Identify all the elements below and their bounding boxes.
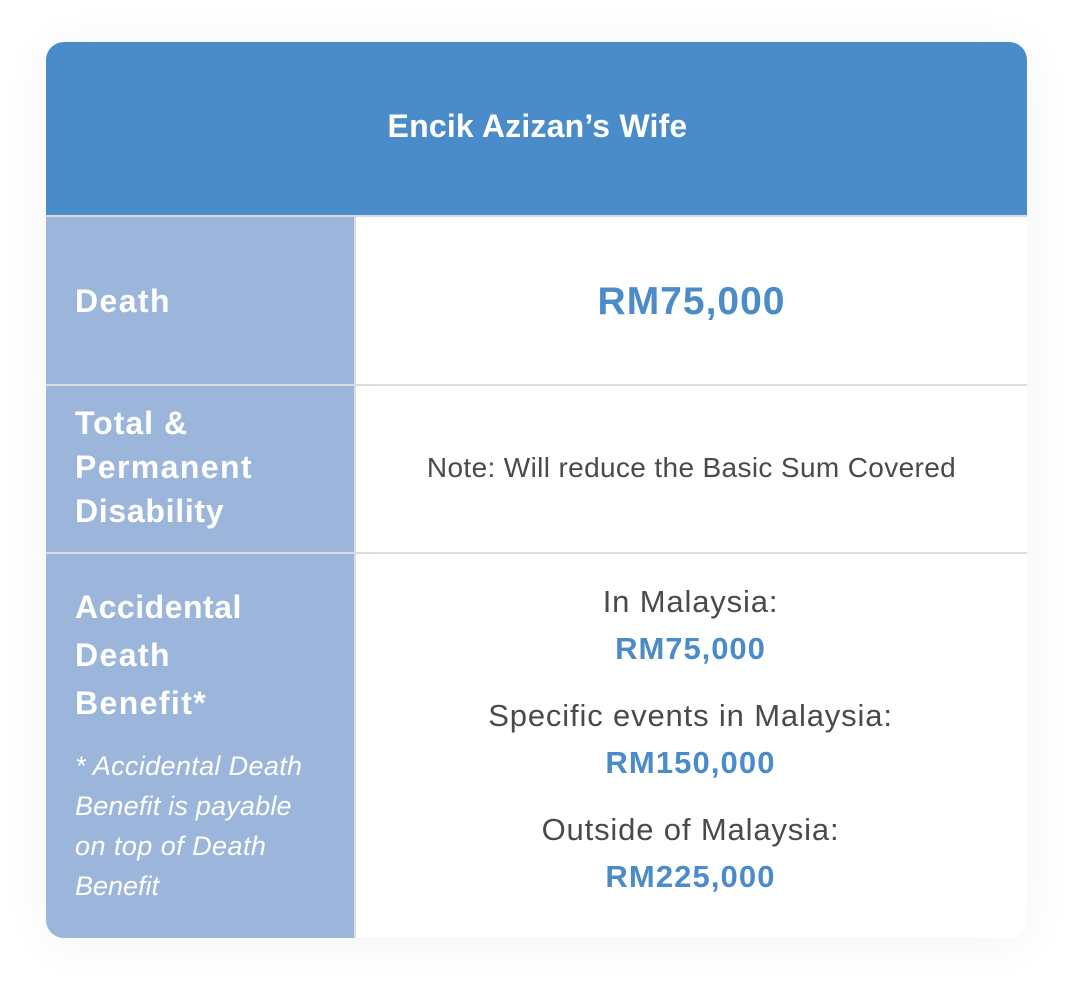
value: specific events: RM150,000 bbox=[605, 745, 776, 780]
footnote bbox=[75, 751, 302, 901]
title: Encik Azizan’s Wife bbox=[388, 108, 687, 144]
value: outside Malaysia: RM225,000 bbox=[605, 859, 776, 894]
value: death: RM75,000 bbox=[598, 280, 785, 323]
value: specific events: Specific events in Malaysia: bbox=[488, 698, 893, 733]
value: in Malaysia: In Malaysia: bbox=[603, 584, 778, 619]
value: in Malaysia: RM75,000 bbox=[615, 631, 766, 666]
value: specific events bbox=[488, 698, 893, 780]
footnote: * Accidental Death bbox=[75, 751, 302, 781]
value: in Malaysia bbox=[603, 584, 778, 666]
row label: accidental death benefit bbox=[75, 589, 242, 721]
footnote: Benefit is payable bbox=[75, 791, 292, 821]
row label: accidental death benefit: Benefit* bbox=[75, 685, 207, 721]
value: outside Malaysia: Outside of Malaysia: bbox=[542, 812, 839, 847]
row label: accidental death benefit: Accidental bbox=[75, 589, 242, 625]
row label: death: Death bbox=[75, 283, 171, 319]
row label: total and permanent disability: Disability bbox=[75, 493, 224, 529]
footnote: on top of Death bbox=[75, 831, 266, 861]
row dividers bbox=[46, 215, 1027, 217]
row label: total and permanent disability: Permanent bbox=[75, 449, 253, 485]
row label: total and permanent disability bbox=[75, 405, 253, 529]
note: Note: Will reduce the Basic Sum Covered bbox=[427, 452, 956, 483]
left column bbox=[46, 217, 354, 938]
header band bbox=[46, 42, 1027, 215]
value: outside Malaysia bbox=[542, 812, 839, 894]
row label: accidental death benefit: Death bbox=[75, 637, 171, 673]
row label: total and permanent disability: Total & bbox=[75, 405, 188, 441]
footnote: Benefit bbox=[75, 871, 159, 901]
